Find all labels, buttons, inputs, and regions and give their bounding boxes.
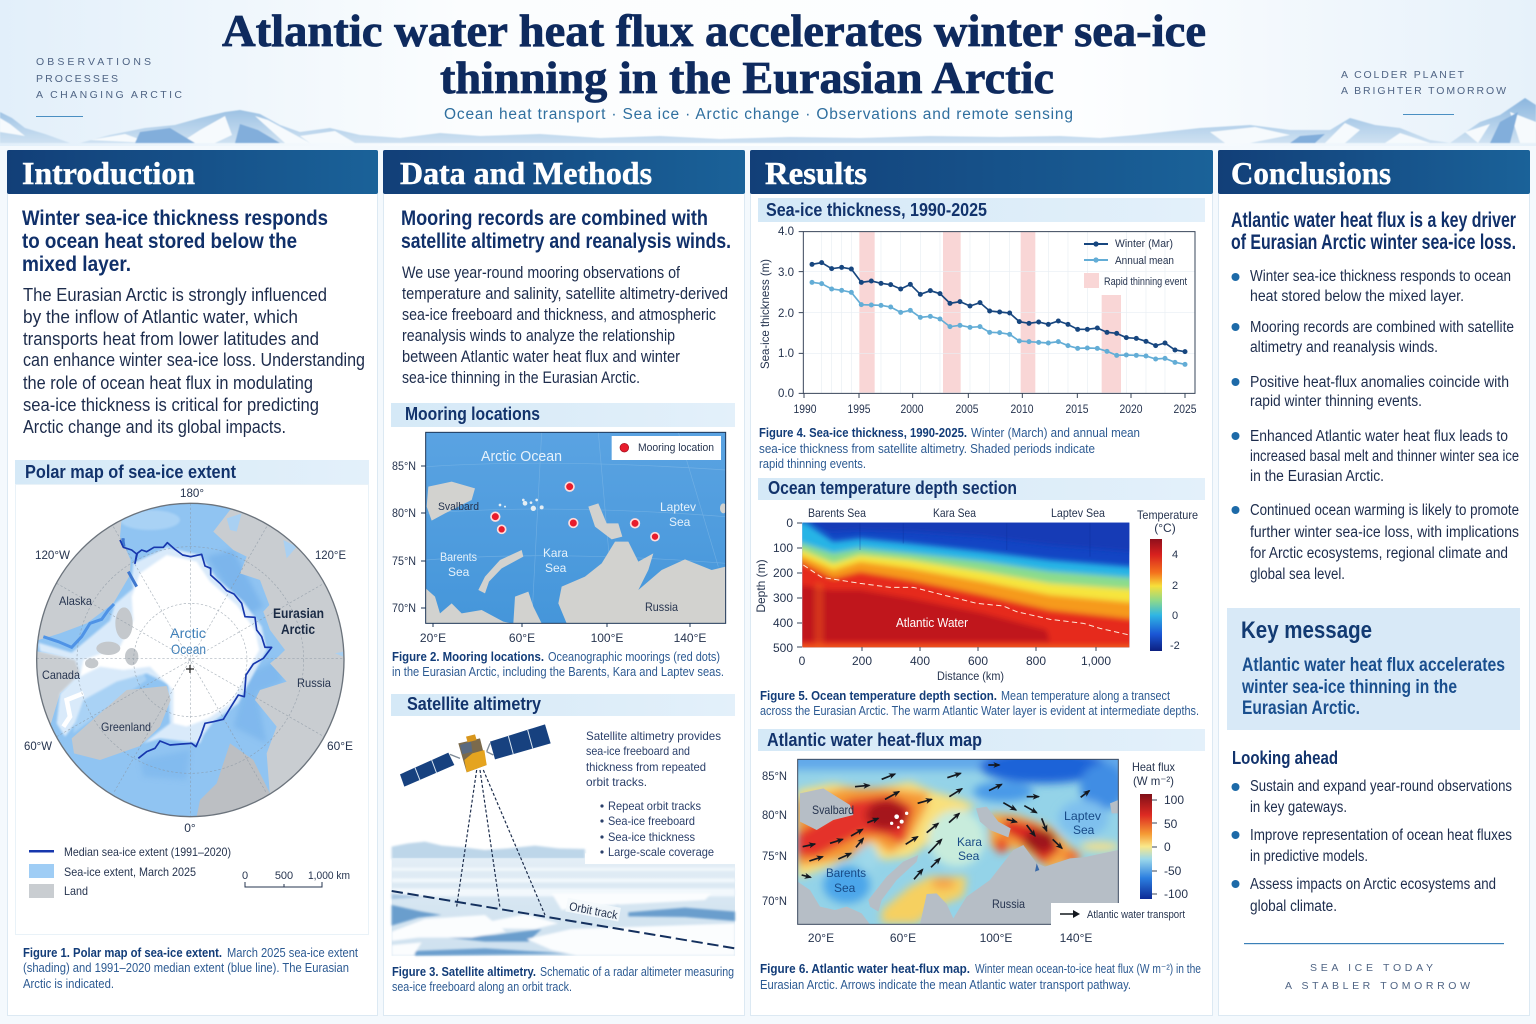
orbit track line [392, 891, 735, 948]
header left tagline [36, 56, 182, 117]
mooring map labels: Sea [448, 565, 470, 579]
heat-flux map labels: 140°E [1060, 931, 1092, 945]
introduction heading: mixed layer. [22, 252, 131, 276]
x axis labels: 1995 [848, 402, 871, 416]
section labels: 0 [799, 654, 806, 668]
header band with mountains [0, 0, 1536, 146]
satellite altimetry text [586, 729, 721, 859]
x axis labels: 2010 [1010, 402, 1034, 416]
heat-flux colour bar [1132, 760, 1188, 901]
key message box: winter sea-ice thinning in the [1241, 677, 1457, 698]
heat-flux map labels: 60°E [890, 931, 916, 945]
heat-flux map labels: Svalbard [812, 803, 854, 817]
figure 6 caption: Figure 6. Atlantic water heat-flux map. [760, 962, 970, 976]
polar map legend: 500 [275, 870, 293, 882]
figure 5 caption: Figure 5. Ocean temperature depth section. [760, 689, 997, 703]
polar map labels: Alaska [59, 594, 92, 608]
temperature colour bar [1137, 508, 1198, 652]
conclusions bullets: Positive heat-flux anomalies coincide with [1250, 374, 1509, 391]
data and methods body text: sea-ice thinning in the Eurasian Arctic. [402, 369, 640, 387]
mooring map labels: 80°N [392, 506, 416, 520]
looking ahead [1232, 748, 1512, 915]
polar map legend: Land [64, 884, 88, 898]
results header: Results [765, 155, 867, 191]
y axis labels: Sea-ice thickness (m) [758, 259, 772, 369]
header left tagline: A CHANGING ARCTIC [36, 89, 182, 101]
closing tagline: SEA ICE TODAY [1310, 962, 1433, 974]
x axis labels: 2000 [900, 402, 924, 416]
transport arrows [802, 765, 1089, 879]
x axis labels [794, 402, 1197, 416]
figure 3 caption: Figure 3. Satellite altimetry. [392, 965, 536, 979]
introduction body text: The Eurasian Arctic is strongly influenced [23, 284, 327, 305]
introduction body text: the role of ocean heat flux in modulating [23, 372, 313, 393]
data and methods body text: reanalysis winds to analyze the relationship [402, 327, 675, 345]
x axis labels: 2005 [956, 402, 979, 416]
temperature colour bar: 0 [1172, 610, 1178, 622]
chart legend: Annual mean [1115, 255, 1174, 267]
mooring map labels: 85°N [392, 459, 416, 473]
data and methods body text [402, 264, 728, 387]
satellite altimetry text: thickness from repeated [586, 760, 706, 774]
section labels: 300 [773, 591, 793, 605]
sea-ice fringe [38, 547, 267, 743]
y axis labels: 4.0 [778, 224, 794, 238]
polar map labels: Arctic [281, 621, 315, 637]
central white ice [80, 555, 259, 727]
polar map [33, 500, 350, 820]
section labels: 800 [1026, 654, 1046, 668]
heat-flux colour bar: 0 [1164, 840, 1171, 854]
looking ahead: Assess impacts on Arctic ecosystems and [1250, 876, 1496, 893]
closing tagline [1285, 962, 1470, 992]
figure 4 caption: Figure 4. Sea-ice thickness, 1990-2025. [759, 426, 967, 440]
title [222, 5, 1206, 103]
polar map labels: Russia [297, 676, 331, 690]
introduction body text: can enhance winter sea-ice loss. Understanding [23, 349, 365, 370]
figure 4 caption: sea-ice thickness from satellite altimetry. Shaded periods indicate [759, 442, 1095, 456]
heat-flux map labels: Kara [957, 835, 982, 849]
figure 1 caption: (shading) and 1991–2020 median extent (blue line). The Eurasian [23, 961, 349, 975]
line chart: sea-ice thickness [758, 224, 1197, 416]
introduction header [7, 150, 378, 194]
data and methods body text: between Atlantic water heat flux and winter [402, 348, 680, 366]
data and methods heading [401, 206, 731, 253]
transport legend [1051, 903, 1193, 925]
polar map labels: 60°W [24, 739, 53, 753]
subheading: heat flux map: Atlantic water heat-flux map [767, 730, 982, 750]
looking ahead: Looking ahead [1232, 748, 1338, 768]
heat-flux map labels: Sea [1073, 823, 1095, 837]
header left tagline: OBSERVATIONS [36, 56, 151, 68]
mooring map labels: Laptev [660, 500, 696, 514]
heat-flux map labels: 80°N [762, 808, 787, 822]
graticule [37, 503, 344, 817]
figure 3 caption [392, 965, 734, 994]
temperature colour bar: 4 [1172, 549, 1178, 561]
data and methods body text: temperature and salinity, satellite altimetry-derived [402, 285, 728, 303]
satellite [400, 724, 551, 787]
section labels: Depth (m) [754, 559, 768, 613]
polar map legend: Sea-ice extent, March 2025 [64, 865, 196, 879]
section labels: 200 [852, 654, 872, 668]
section labels: Atlantic Water [896, 615, 969, 630]
conclusions heading [1231, 208, 1516, 254]
heat-flux map labels: Sea [834, 881, 856, 895]
header right tagline: A BRIGHTER TOMORROW [1341, 85, 1506, 97]
polar map labels [24, 486, 353, 835]
section labels: 400 [773, 616, 793, 630]
polar map labels: Greenland [101, 720, 151, 734]
heat-flux colour bar: (W m⁻²) [1133, 774, 1174, 788]
data and methods body text: We use year-round mooring observations of [402, 264, 680, 282]
key message box: Eurasian Arctic. [1242, 698, 1360, 719]
conclusions header [1218, 150, 1530, 194]
mooring map labels [392, 442, 714, 645]
polar map legend [29, 845, 350, 898]
mooring map labels: Mooring location [638, 442, 714, 454]
figure 3 caption: Schematic of a radar altimeter measuring [540, 965, 734, 979]
mooring map labels: Kara [543, 546, 568, 560]
mooring map labels: Arctic Ocean [481, 449, 562, 465]
results header [750, 150, 1213, 194]
figure 2 caption [392, 650, 724, 679]
figure 1 caption: March 2025 sea-ice extent [227, 946, 358, 960]
sea ice scene [392, 842, 735, 956]
mooring map labels: Svalbard [438, 501, 479, 513]
temperature colour bar: 2 [1172, 580, 1178, 592]
introduction body text: transports heat from lower latitudes and [23, 328, 319, 349]
satellite beams [457, 770, 545, 915]
panel: results [750, 150, 1213, 1016]
panel: conclusions [1218, 150, 1530, 1016]
section labels: 0 [786, 516, 793, 530]
heat-flux map [762, 750, 1193, 945]
data and methods heading: Mooring records are combined with [401, 206, 708, 230]
chart legend: Winter (Mar) [1115, 238, 1173, 250]
subheading: ocean temperature [758, 478, 1205, 500]
figure 5 caption: across the Eurasian Arctic. The warm Atlantic Water layer is evident at intermediate depths. [760, 704, 1199, 718]
conclusions bullets: rapid winter thinning events. [1250, 393, 1422, 410]
mooring map labels: 75°N [392, 554, 416, 568]
heat-flux colour bar: -100 [1164, 887, 1188, 901]
heat-flux map labels: Barents [826, 866, 866, 880]
closing tagline: A STABLER TOMORROW [1285, 980, 1470, 992]
data and methods heading: satellite altimetry and reanalysis winds. [401, 229, 731, 253]
polar map labels: Eurasian [273, 605, 324, 621]
section labels: 600 [968, 654, 988, 668]
figure 2 caption: Figure 2. Mooring locations. [392, 650, 544, 664]
conclusions bullets: for Arctic ecosystems, regional climate and [1250, 545, 1508, 562]
heat-flux map labels: Laptev [1064, 809, 1101, 823]
orbit track label: Orbit track [568, 899, 620, 922]
section labels: 400 [910, 654, 930, 668]
mooring map labels: 70°N [392, 601, 416, 615]
polar map legend: 1,000 km [308, 870, 350, 882]
conclusions bullets [1232, 268, 1519, 583]
polar map legend: Median sea-ice extent (1991–2020) [64, 845, 231, 859]
data and methods header [383, 150, 745, 194]
panel: data and methods [383, 150, 745, 1016]
subheading: satellite altimetry: Satellite altimetry [407, 694, 541, 714]
polar map labels: Arctic [170, 625, 206, 641]
section labels [754, 506, 1111, 683]
y axis labels: 0.0 [778, 386, 794, 400]
section labels: 1,000 [1081, 654, 1111, 668]
mooring map labels: Sea [669, 515, 691, 529]
looking ahead: in predictive models. [1250, 848, 1368, 865]
satellite altimetry text: Large-scale coverage [608, 845, 714, 859]
looking ahead: in key gateways. [1250, 799, 1347, 816]
polar map labels: 180° [180, 486, 204, 500]
heat-flux map labels: 20°E [808, 931, 834, 945]
looking ahead: global climate. [1250, 898, 1337, 915]
chart legend: Rapid thinning event [1104, 276, 1187, 288]
figure 5 caption: Mean temperature along a transect [1001, 689, 1170, 703]
polar map labels: Ocean [171, 641, 206, 657]
annual mean line [812, 282, 1185, 364]
temperature colour bar: -2 [1170, 640, 1180, 652]
conclusions bullets: global sea level. [1250, 566, 1345, 583]
satellite altimetry text: Repeat orbit tracks [608, 799, 701, 813]
introduction heading [22, 206, 328, 276]
subheading: mooring locations [391, 403, 735, 427]
moorings [491, 482, 659, 541]
figure 6 caption: Winter mean ocean-to-ice heat flux (W m⁻²) in the [975, 962, 1201, 976]
satellite altimetry text: Satellite altimetry provides [586, 729, 721, 743]
y axis labels: 1.0 [778, 346, 794, 360]
satellite altimetry text: orbit tracks. [586, 775, 647, 789]
subheading: mooring locations: Mooring locations [405, 404, 540, 424]
greenland and islands [72, 607, 171, 760]
conclusions bullets: heat stored below the mixed layer. [1250, 288, 1464, 305]
chart legend [1084, 238, 1187, 288]
satellite altimetry illustration [392, 724, 735, 956]
y axis labels [758, 224, 794, 400]
figure 5 caption [760, 689, 1199, 718]
x axis labels: 2025 [1174, 402, 1197, 416]
subheading: sea-ice thickness: Sea-ice thickness, 1990-2025 [766, 200, 987, 220]
section labels: Kara Sea [933, 506, 976, 520]
temperature colour bar: Temperature [1137, 508, 1198, 522]
panel: introduction [7, 150, 378, 1016]
heat-flux colour bar: Heat flux [1132, 760, 1175, 774]
subheading: polar map [15, 460, 369, 484]
y axis labels: 2.0 [778, 306, 794, 320]
x axis labels: 1990 [794, 402, 817, 416]
data and methods header: Data and Methods [400, 155, 652, 191]
header left tagline: PROCESSES [36, 73, 118, 85]
figure 4 caption [759, 426, 1140, 471]
heat-flux map labels: 85°N [762, 769, 787, 783]
introduction body text: sea-ice thickness is critical for predicting [23, 394, 319, 415]
rapid thinning shading [859, 232, 1121, 393]
heat-flux map labels [762, 769, 1101, 945]
section labels: 100 [773, 541, 793, 555]
header right tagline: A COLDER PLANET [1341, 69, 1465, 81]
mooring map labels: Russia [645, 600, 678, 614]
satellite altimetry text: Sea-ice thickness [608, 830, 695, 844]
introduction body text: by the inflow of Atlantic water, which [23, 306, 298, 327]
transport legend: Atlantic water transport [1087, 909, 1185, 921]
mooring map labels: 20°E [420, 631, 446, 645]
header right tagline [1341, 69, 1506, 115]
figure 1 caption: Arctic is indicated. [23, 977, 114, 991]
introduction heading: Winter sea-ice thickness responds [22, 206, 328, 230]
mooring map [426, 432, 727, 623]
subheading: heat flux map [758, 729, 1205, 751]
figure 4 caption: rapid thinning events. [759, 457, 866, 471]
subheading: ocean temperature: Ocean temperature depth section [768, 478, 1017, 498]
heat-flux map labels: Russia [992, 897, 1025, 911]
title: thinning in the Eurasian Arctic [440, 52, 1054, 103]
temperature depth section [754, 500, 1198, 683]
conclusions bullets: altimetry and reanalysis winds. [1250, 339, 1438, 356]
satellite altimetry text: sea-ice freeboard and [586, 744, 690, 758]
mooring map labels: Barents [440, 550, 477, 564]
section labels: 200 [773, 566, 793, 580]
figure 2 caption: in the Eurasian Arctic, including the Barents, Kara and Laptev seas. [392, 665, 724, 679]
figure 1 caption: Figure 1. Polar map of sea-ice extent. [23, 946, 222, 960]
heat-flux colour bar: -50 [1164, 864, 1182, 878]
conclusions bullets: Enhanced Atlantic water heat flux leads to [1250, 428, 1508, 445]
introduction body text [23, 284, 365, 437]
polar map labels: 0° [184, 821, 196, 835]
heat-flux colour bar: 100 [1164, 793, 1184, 807]
figure 2 caption: Oceanographic moorings (red dots) [548, 650, 720, 664]
figure 1 caption [23, 946, 358, 991]
subheading: polar map: Polar map of sea-ice extent [25, 462, 236, 482]
conclusions header: Conclusions [1231, 155, 1391, 191]
mooring map labels: 60°E [509, 631, 535, 645]
conclusions bullets: in the Eurasian Arctic. [1250, 468, 1384, 485]
key message box [1227, 608, 1520, 730]
subheading: satellite altimetry [391, 694, 735, 716]
data and methods body text: sea-ice freeboard and thickness, and atmospheric [402, 306, 716, 324]
polar map labels: 120°W [35, 548, 71, 562]
x axis labels: 2020 [1120, 402, 1143, 416]
section labels: Distance (km) [937, 669, 1004, 683]
introduction body text: Arctic change and its global impacts. [23, 416, 286, 437]
subtitle: Ocean heat transport · Sea ice · Arctic change · Observations and remote sensing [444, 106, 1073, 123]
introduction header: Introduction [22, 155, 195, 191]
y axis labels: 3.0 [778, 265, 794, 279]
subheading: sea-ice thickness [758, 198, 1205, 222]
winter line [812, 263, 1185, 352]
x axis labels: 2015 [1066, 402, 1089, 416]
heat-flux colour bar: 50 [1164, 817, 1178, 831]
figure 6 caption: Eurasian Arctic. Arrows indicate the mean Atlantic water transport pathway. [760, 978, 1131, 992]
heat-flux map labels: 70°N [762, 894, 787, 908]
heat-flux map labels: 100°E [980, 931, 1012, 945]
figure 6 caption [760, 962, 1201, 992]
polar map labels: 60°E [327, 739, 353, 753]
satellite altimetry text: Sea-ice freeboard [608, 814, 695, 828]
figure 3 caption: sea-ice freeboard along an orbit track. [392, 980, 572, 994]
key message box: Key message [1241, 617, 1372, 644]
polar map labels: 120°E [315, 548, 346, 562]
section labels: 500 [773, 641, 793, 655]
introduction heading: to ocean heat stored below the [22, 229, 297, 253]
polar map labels: Canada [42, 668, 80, 682]
heat-flux map labels: 75°N [762, 849, 787, 863]
section labels: Laptev Sea [1051, 506, 1105, 520]
mooring map labels: 140°E [674, 631, 706, 645]
figure 4 caption: Winter (March) and annual mean [971, 426, 1140, 440]
title: Atlantic water heat flux accelerates winter sea-ice [222, 5, 1206, 56]
heat-flux map labels: Sea [958, 849, 980, 863]
mooring map labels: 100°E [591, 631, 623, 645]
polar map legend: 0 [242, 870, 248, 882]
temperature colour bar: (°C) [1154, 521, 1176, 535]
mooring map labels: Sea [545, 561, 567, 575]
land [33, 500, 350, 817]
section labels: Barents Sea [808, 506, 866, 520]
